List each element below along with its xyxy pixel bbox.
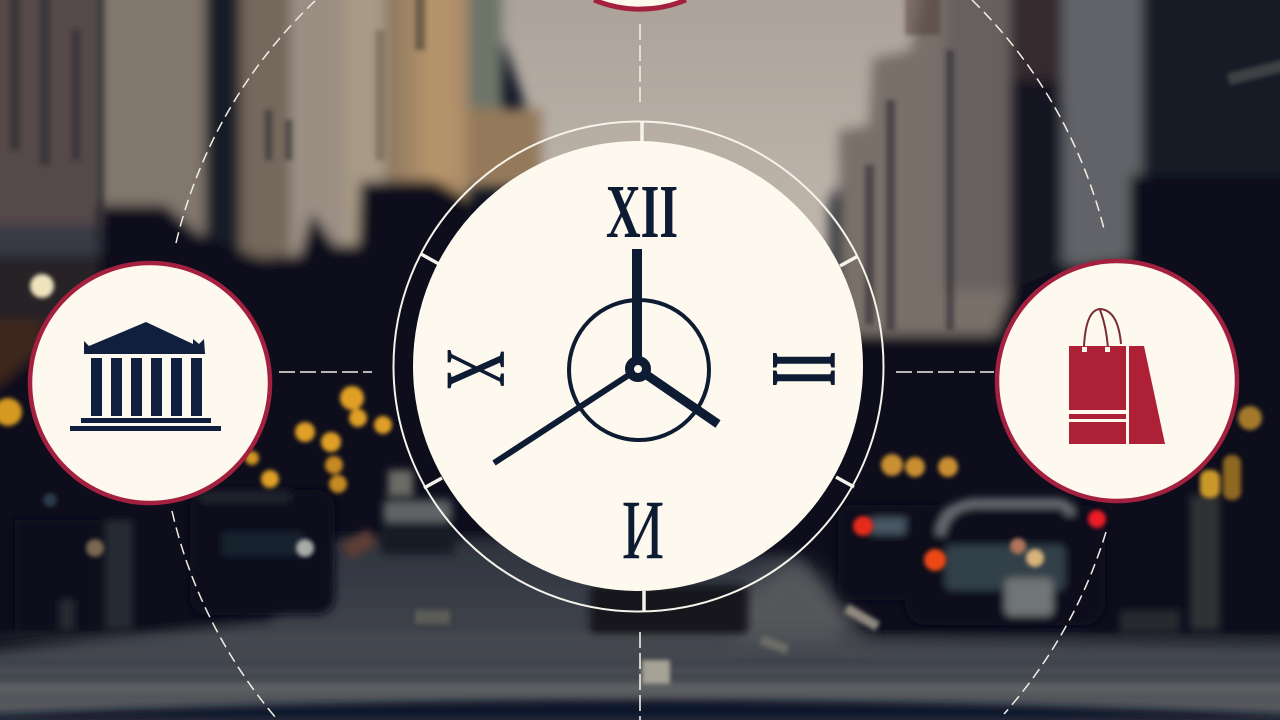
cars [190,490,335,615]
dark treeline and lower street [0,175,1280,650]
left buildings [0,0,102,230]
road [0,540,1280,720]
icon: shopping bags [1069,309,1165,444]
top node circle (cropped) [594,0,686,9]
dashboard silhouette at the bottom [0,700,1280,720]
right node: shopping bag icon [997,261,1237,501]
numeral XII: XII [606,170,678,254]
road streaks [0,636,1280,639]
clock outer ring with ticks [394,122,884,612]
vertical building detail [10,0,954,330]
infographic: clock over blurred city street: II [752,352,856,386]
clock face [413,141,863,591]
connector dashed lines [279,24,994,720]
left node: bank icon [30,263,270,503]
numeral at the bottom: И [622,484,664,577]
icon: classical building [70,322,221,431]
car lights [853,516,873,536]
road patch at right [735,560,870,640]
road markings [642,660,670,684]
numeral X on the left, rotated: X [429,349,523,389]
right buildings [838,0,1020,340]
clock hands [494,249,718,463]
outer dashed orbit ring [172,0,1106,718]
street lights [30,274,54,298]
